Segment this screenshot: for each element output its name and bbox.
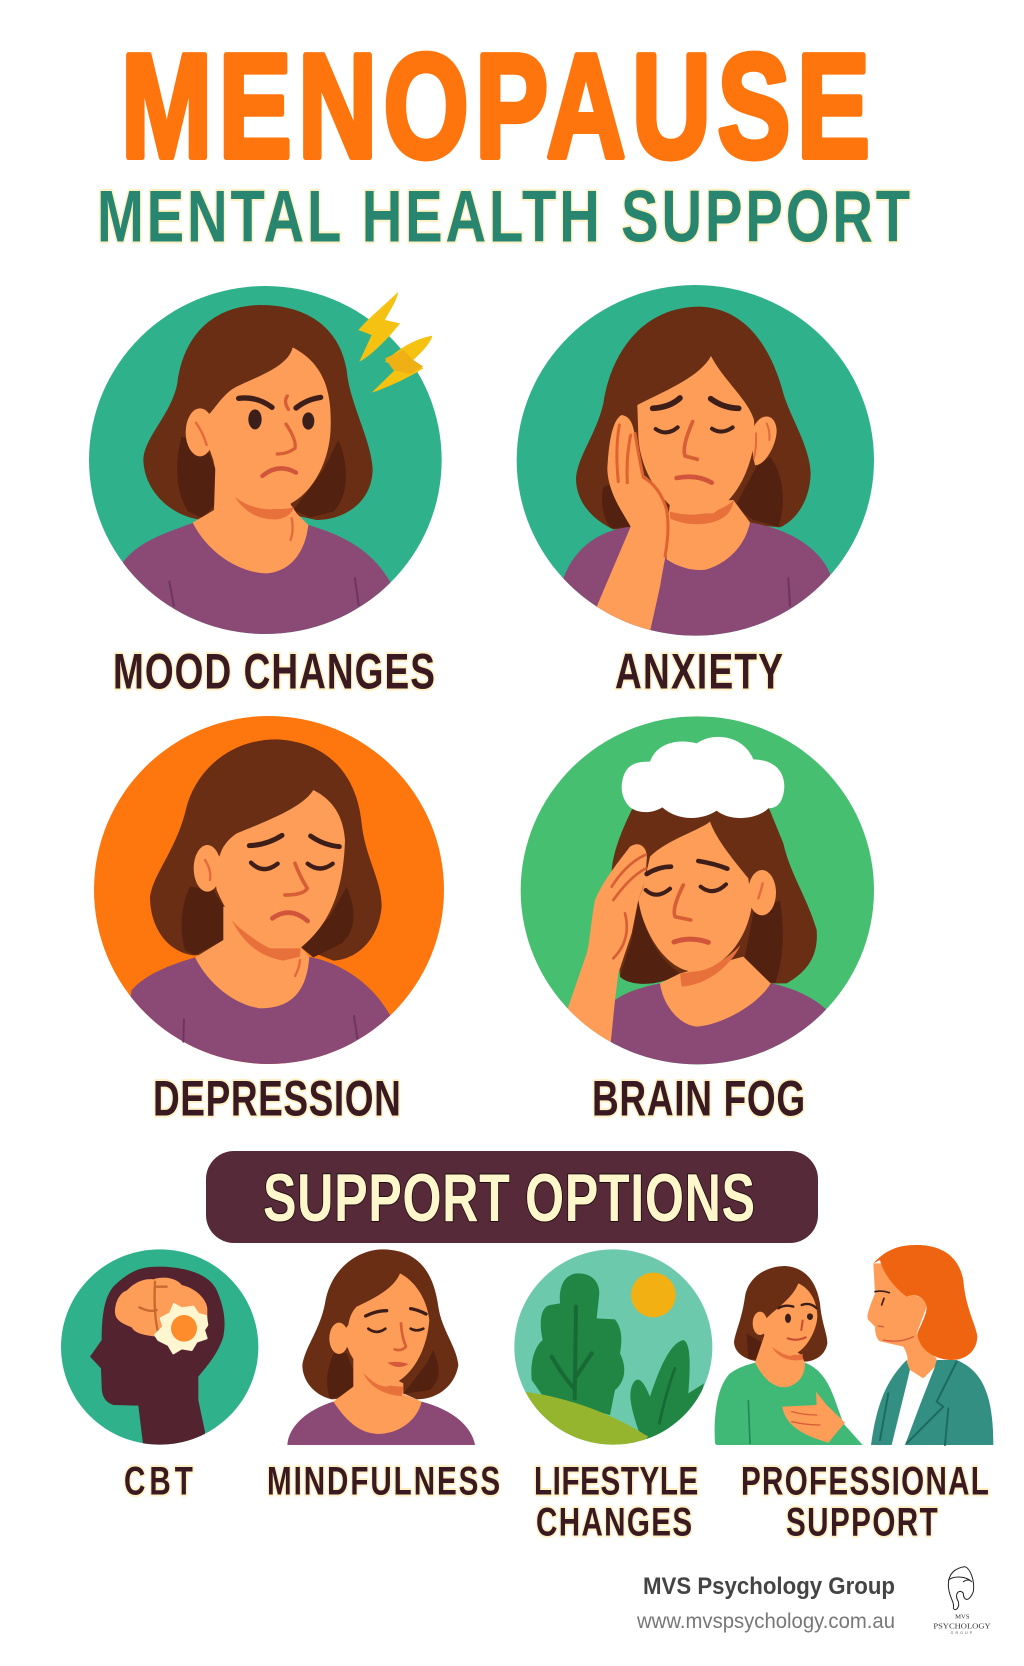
footer: logo (933, 1567, 991, 1635)
label: lifestyle changes (534, 1459, 698, 1545)
icon: lightning bolts (358, 292, 432, 393)
panel: lifestyle nature scene (514, 1249, 712, 1450)
panel: brain fog illustration (521, 716, 874, 1070)
support options banner: SUPPORT OPTIONS (263, 1160, 755, 1236)
label: mood changes: MOOD CHANGES (113, 644, 435, 700)
icon: fog cloud (622, 737, 784, 818)
panel: CBT head icon (61, 1249, 258, 1453)
panel: mindfulness figure (287, 1249, 475, 1445)
figure: client (715, 1266, 863, 1445)
title: MENOPAUSE (121, 23, 870, 189)
label: mindfulness: MINDFULNESS (267, 1459, 500, 1504)
label: professional support: SUPPORT (786, 1500, 938, 1545)
support options banner (206, 1151, 818, 1243)
panel: mood changes illustration (89, 286, 442, 640)
subtitle: MENTAL HEALTH SUPPORT (97, 175, 910, 257)
figure: counsellor (867, 1245, 993, 1445)
label: anxiety: ANXIETY (615, 644, 783, 700)
panel: anxiety illustration (517, 285, 874, 643)
footer: website: www.mvspsychology.com.au (636, 1610, 895, 1633)
footer: logo: PSYCHOLOGY (933, 1622, 991, 1630)
label: depression: DEPRESSION (153, 1071, 401, 1127)
label: lifestyle changes: LIFESTYLE (534, 1459, 698, 1504)
label: brain fog: BRAIN FOG (592, 1071, 805, 1127)
footer: logo: MVS (955, 1614, 970, 1621)
panel: depression illustration (94, 716, 444, 1070)
footer: organisation name: MVS Psychology Group (643, 1573, 895, 1600)
label: professional support (741, 1459, 989, 1545)
label: professional support: PROFESSIONAL (741, 1459, 989, 1504)
panel: professional support figures (715, 1245, 993, 1445)
footer: logo: GROUP (951, 1631, 974, 1635)
label: lifestyle changes: CHANGES (536, 1500, 692, 1545)
label: CBT: CBT (124, 1459, 193, 1504)
